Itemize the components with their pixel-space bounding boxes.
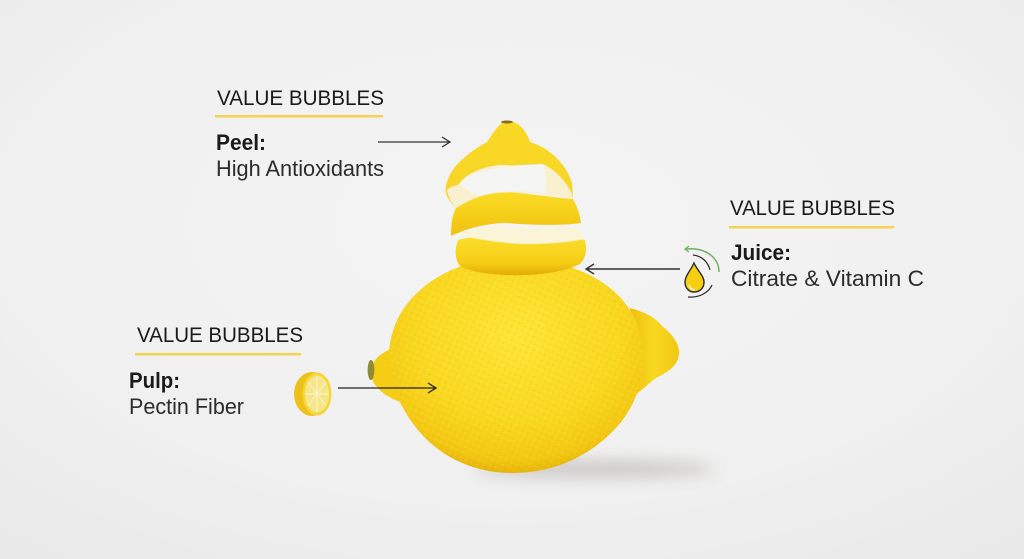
lemon rind texture bbox=[389, 258, 643, 473]
heading: pulp callout: VALUE BUBBLES bbox=[137, 323, 303, 347]
callout: peel bbox=[215, 86, 450, 181]
arrow: pulp bbox=[338, 383, 436, 393]
label: peel: Peel: bbox=[216, 130, 266, 155]
arrow: juice bbox=[586, 264, 680, 274]
white pith lower bbox=[459, 226, 584, 244]
value: pulp: Pectin Fiber bbox=[129, 394, 244, 419]
label: pulp: Pulp: bbox=[129, 368, 180, 393]
icon: juice drop bbox=[685, 246, 719, 297]
white pith ring bbox=[447, 164, 573, 208]
middle peel band bbox=[451, 192, 581, 236]
lemon main body bbox=[389, 258, 643, 473]
underline: peel heading bbox=[215, 115, 383, 118]
arrow: peel bbox=[378, 137, 450, 147]
illustration: peeled lemon bbox=[368, 120, 679, 473]
callout: pulp bbox=[129, 323, 436, 419]
lemon right nub bbox=[628, 308, 679, 400]
icon: lemon slice bbox=[294, 372, 332, 416]
lemon cast shadow bbox=[475, 461, 715, 477]
underline: juice heading bbox=[729, 226, 894, 228]
label: juice: Juice: bbox=[731, 240, 791, 265]
stem tip bbox=[501, 120, 513, 124]
heading: peel callout: VALUE BUBBLES bbox=[217, 86, 384, 110]
heading: juice callout: VALUE BUBBLES bbox=[730, 196, 895, 220]
callout: juice bbox=[586, 196, 924, 297]
lemon stem scar bbox=[368, 360, 374, 380]
lower peel band bbox=[456, 234, 586, 275]
underline: pulp heading bbox=[135, 353, 301, 356]
pith inner opening bbox=[460, 164, 546, 196]
value: peel: High Antioxidants bbox=[216, 156, 384, 181]
value: juice: Citrate & Vitamin C bbox=[731, 266, 924, 291]
lemon left nub bbox=[371, 344, 412, 406]
upper peel cap bbox=[445, 121, 573, 208]
